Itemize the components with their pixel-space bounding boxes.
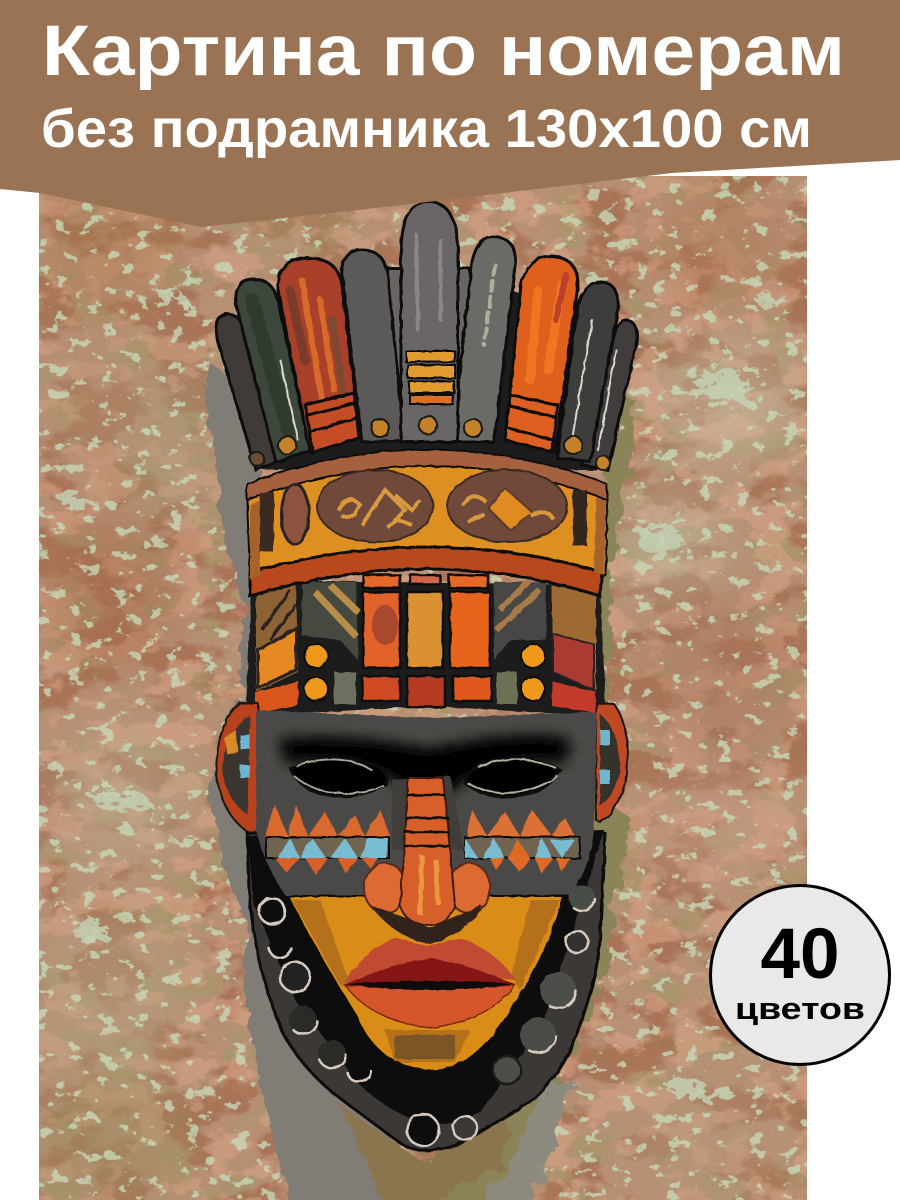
feather colour streaks xyxy=(252,235,616,450)
badge label: цветов xyxy=(735,991,865,1026)
ornament oval right xyxy=(447,470,567,542)
band main ochre xyxy=(247,466,607,578)
shadow: grey streak lower right xyxy=(490,1080,572,1200)
feather dark right xyxy=(557,282,618,462)
zigzag upper orange left xyxy=(265,805,390,836)
oval right glyphs xyxy=(462,497,554,522)
right side panel xyxy=(552,586,596,690)
feather far right xyxy=(582,320,637,470)
ear right tile lower xyxy=(600,770,610,784)
band top rust strip xyxy=(247,450,607,504)
bottom left strip xyxy=(255,681,298,713)
left dark ticks xyxy=(260,492,274,552)
zigzag lower right xyxy=(490,858,570,874)
beard rings xyxy=(259,885,595,1146)
eye right highlight xyxy=(468,760,558,793)
orange blocks xyxy=(362,575,492,707)
yellow discs xyxy=(304,644,545,701)
feather behind centre xyxy=(385,268,470,440)
headdress feathers xyxy=(216,202,637,470)
badge: 40 colours xyxy=(710,886,890,1064)
left side panel stripes xyxy=(258,590,296,688)
zigzag band right xyxy=(465,837,580,858)
pale mint patches xyxy=(59,292,784,1098)
small oval xyxy=(281,484,309,544)
cheek zigzags left xyxy=(265,805,390,875)
feather banded stripes xyxy=(305,351,558,452)
upper lip dark xyxy=(344,958,516,990)
left grey panel diagonals xyxy=(315,585,358,636)
lower headdress panel xyxy=(246,580,606,716)
mouth line xyxy=(346,981,514,990)
rivets xyxy=(250,416,610,470)
band side shading xyxy=(250,498,606,580)
zigzag band left xyxy=(266,837,389,858)
ear right inner xyxy=(600,714,620,806)
title line 2: без подрамника 130х100 см xyxy=(41,99,812,159)
cheek dark patches xyxy=(292,900,560,1062)
feather red left xyxy=(278,258,360,452)
small tile right xyxy=(497,672,517,704)
right grey panel diagonals xyxy=(496,580,540,630)
beard xyxy=(247,833,605,1151)
ear left tile lower xyxy=(240,765,250,778)
feather grey left xyxy=(342,250,404,442)
feather dark green left xyxy=(235,279,310,462)
lips xyxy=(344,938,516,1028)
nostrils xyxy=(364,863,490,913)
right feather stripes xyxy=(505,395,558,452)
feather orange right xyxy=(505,256,578,452)
left side panel xyxy=(256,582,298,692)
band lower red strip xyxy=(250,547,602,596)
small tile left xyxy=(334,672,356,704)
block colour blotch xyxy=(372,605,398,645)
ornament oval left xyxy=(317,470,433,542)
nose bridge shade xyxy=(392,776,464,850)
cast shadow of the mask xyxy=(208,365,636,1200)
oval left glyphs xyxy=(338,490,420,528)
left grey panel xyxy=(302,582,358,660)
upper lip outer xyxy=(344,938,516,983)
feather backing xyxy=(240,280,612,470)
shadow: grey left side xyxy=(208,365,410,1200)
yellow cheeks xyxy=(288,896,563,1070)
shadow: olive right side xyxy=(430,400,636,1200)
chin shade xyxy=(395,1035,455,1059)
ear right tile xyxy=(600,730,610,745)
left feather stripes xyxy=(305,393,359,452)
ear right xyxy=(596,703,627,822)
oval right glyph diamond xyxy=(488,488,532,530)
face upper dark xyxy=(256,710,597,895)
mask xyxy=(216,202,637,1151)
badge number: 40 xyxy=(761,915,839,994)
eye left xyxy=(290,758,388,796)
left feather lines xyxy=(306,404,356,432)
bottom right strip xyxy=(552,681,596,713)
zigzag blue right xyxy=(465,838,575,858)
feather far left xyxy=(216,314,280,470)
ear left tiles xyxy=(240,735,250,749)
header banner xyxy=(0,0,900,227)
panel: geometric blocks xyxy=(255,575,596,713)
feather centre xyxy=(401,202,458,442)
centre stripes xyxy=(406,351,455,404)
zigzag lower left xyxy=(275,858,378,875)
cheek zigzags right xyxy=(465,810,580,874)
right dark ticks xyxy=(573,490,587,546)
zigzag orange middle right xyxy=(508,840,530,858)
shadow: lower brown under chin xyxy=(340,1105,510,1200)
nose xyxy=(400,778,455,925)
eye left highlight xyxy=(294,760,384,794)
crown band xyxy=(247,450,607,596)
beard inner black xyxy=(248,830,604,1124)
right grey panel xyxy=(494,582,546,660)
zigzag upper orange right xyxy=(467,810,575,836)
eye right xyxy=(466,759,560,797)
lower lip xyxy=(345,985,515,1028)
ear left orange tile xyxy=(224,730,238,755)
painting background xyxy=(30,176,807,1200)
nose under shadow xyxy=(370,905,482,944)
ear left inner xyxy=(222,716,250,815)
title line 1: Картина по номерам xyxy=(42,12,845,91)
nose stripes xyxy=(404,795,450,846)
nose highlights xyxy=(420,855,438,915)
ear left xyxy=(216,703,258,835)
feather grey right xyxy=(452,237,516,442)
brow shadow xyxy=(280,735,570,795)
right feather lines xyxy=(508,406,557,440)
zigzag blue left xyxy=(278,838,388,858)
right side panel red xyxy=(553,634,594,690)
